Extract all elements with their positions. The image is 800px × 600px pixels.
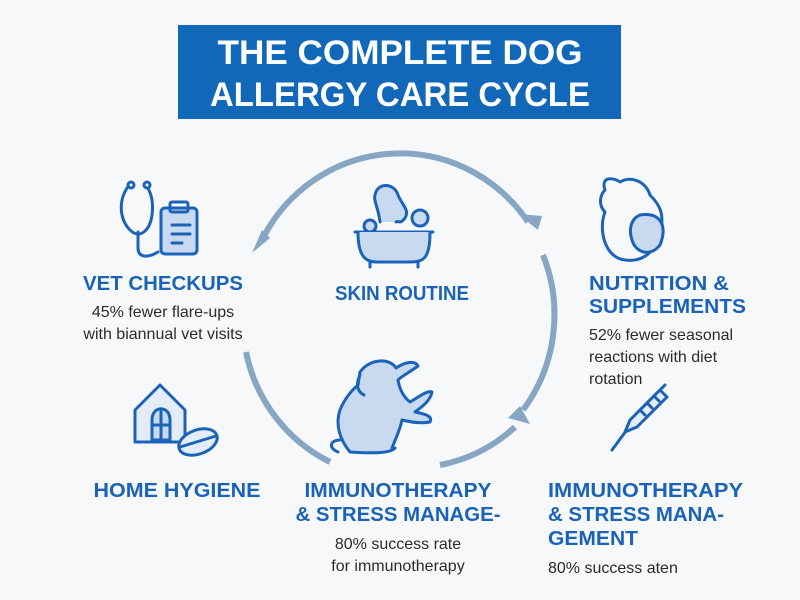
- title: THE COMPLETE DOG: [218, 34, 582, 72]
- text: vet checkups: with biannual vet visits: [82, 326, 243, 343]
- text: home hygiene: HOME HYGIENE: [94, 480, 260, 502]
- text: immunotherapy center: 80% success rate: [335, 536, 461, 553]
- icon: syringe: [612, 385, 667, 450]
- text: immunotherapy center: for immunotherapy: [331, 558, 465, 575]
- cycle arrows: [246, 153, 554, 465]
- text: immunotherapy right: GEMENT: [548, 528, 638, 550]
- text: nutrition: reactions with diet: [589, 349, 718, 366]
- text: vet checkups: VET CHECKUPS: [83, 273, 243, 295]
- text: immunotherapy center: & STRESS MANAGE-: [296, 504, 500, 526]
- text: immunotherapy center: IMMUNOTHERAPY: [304, 480, 492, 502]
- text: nutrition: rotation: [589, 371, 642, 388]
- icon: dog in bathtub: [355, 186, 433, 267]
- text: immunotherapy right: [548, 480, 744, 577]
- text: nutrition: SUPPLEMENTS: [589, 296, 746, 318]
- text: vet checkups: [82, 273, 243, 343]
- title: ALLERGY CARE CYCLE: [210, 76, 590, 114]
- text: immunotherapy right: IMMUNOTHERAPY: [548, 480, 744, 502]
- text: immunotherapy center: [296, 480, 500, 575]
- text: immunotherapy right: & STRESS MANA-: [548, 504, 724, 526]
- text: vet checkups: 45% fewer flare-ups: [92, 304, 234, 321]
- text: skin routine: SKIN ROUTINE: [335, 283, 469, 305]
- text: immunotherapy right: 80% success aten: [548, 560, 678, 577]
- icon: sitting dog: [331, 361, 432, 453]
- icon: stethoscope clipboard: [121, 182, 197, 256]
- text: nutrition: [589, 273, 746, 388]
- title: [178, 25, 621, 119]
- icon: nutrition head: [600, 179, 663, 260]
- icon: house with pill: [135, 385, 221, 460]
- text: nutrition: NUTRITION &: [589, 273, 729, 295]
- text: nutrition: 52% fewer seasonal: [589, 327, 733, 344]
